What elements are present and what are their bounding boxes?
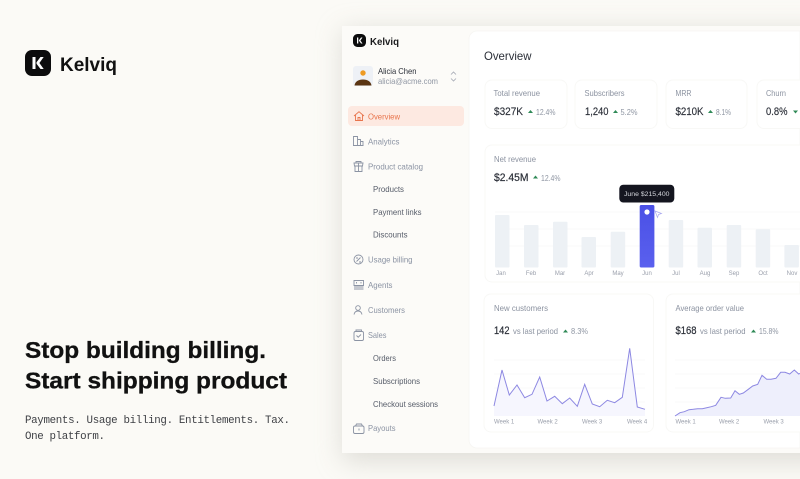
panel: average order value chart bbox=[666, 294, 800, 432]
week labels: Week 1 bbox=[494, 420, 515, 426]
data point marker bbox=[644, 209, 650, 215]
sub-items: catalog bbox=[373, 184, 422, 240]
month labels: Jun bbox=[642, 271, 652, 277]
tooltip: June $215,400 bbox=[624, 191, 670, 198]
KPI card: Total revenue: $327K bbox=[494, 106, 523, 118]
headline: Stop building billing. bbox=[25, 337, 266, 363]
subheading bbox=[25, 415, 290, 443]
sidebar logo bbox=[353, 34, 399, 48]
KPI card: Subscribers: 5.2% bbox=[620, 108, 638, 117]
headline: Start shipping product bbox=[25, 368, 287, 394]
month labels: Apr bbox=[584, 271, 594, 277]
sub-items: sales: Checkout sessions bbox=[373, 399, 438, 409]
panel: main content bbox=[469, 31, 800, 448]
app window bbox=[342, 26, 800, 453]
nav item: Analytics bbox=[353, 136, 400, 146]
panel: average order value chart: Average order value bbox=[676, 303, 744, 313]
nav item: Payouts: Payouts bbox=[368, 423, 396, 433]
panel: average order value chart: $168 bbox=[676, 325, 696, 337]
panel: new customers chart bbox=[484, 294, 654, 432]
sub-items: sales: Subscriptions bbox=[373, 376, 420, 386]
month labels: Feb bbox=[526, 271, 537, 277]
page title: Overview bbox=[484, 49, 532, 63]
month labels: Aug bbox=[700, 271, 710, 277]
month labels: Mar bbox=[555, 271, 565, 277]
KPI card: Churn: 0.8% bbox=[766, 106, 788, 118]
week labels bbox=[676, 420, 784, 426]
nav item: Overview (active): Overview bbox=[368, 112, 401, 122]
panel: average order value chart: vs last period bbox=[700, 326, 746, 336]
sidebar logo: Kelviq bbox=[370, 36, 399, 48]
nav item: Overview (active) bbox=[348, 106, 464, 126]
week labels bbox=[494, 420, 648, 426]
bars bbox=[495, 205, 799, 268]
nav item: Customers bbox=[354, 305, 405, 315]
user profile: Alicia Chen bbox=[378, 66, 417, 76]
area chart bbox=[675, 370, 800, 416]
week labels: Week 2 bbox=[719, 420, 740, 426]
sub-items: sales bbox=[373, 353, 438, 409]
panel: new customers chart: 142 bbox=[494, 325, 510, 337]
week labels: Week 2 bbox=[538, 420, 558, 426]
cursor arrow bbox=[655, 211, 662, 218]
KPI card: Churn: Churn bbox=[766, 88, 786, 98]
KPI card: MRR bbox=[666, 80, 747, 128]
month labels: Sep bbox=[729, 271, 740, 277]
month labels: Nov bbox=[787, 271, 797, 277]
KPI card: Subscribers: Subscribers bbox=[584, 88, 624, 98]
week labels: Week 1 bbox=[676, 420, 696, 426]
month labels: May bbox=[612, 271, 624, 277]
tooltip bbox=[619, 185, 674, 202]
KPI card: Total revenue: 12.4% bbox=[536, 108, 556, 117]
KPI card: Churn bbox=[757, 80, 800, 128]
panel: net revenue chart: $2.45M bbox=[494, 172, 528, 184]
panel: new customers chart: vs last period bbox=[513, 326, 558, 336]
panel: net revenue chart: Net revenue bbox=[494, 154, 536, 164]
nav item: Payouts bbox=[354, 423, 396, 434]
KPI card: Subscribers bbox=[575, 80, 657, 128]
KPI card: MRR: 8.1% bbox=[716, 108, 731, 117]
KPI card: MRR: MRR bbox=[676, 88, 692, 98]
panel: sidebar bbox=[348, 34, 464, 434]
KPI card: Subscribers: 1,240 bbox=[585, 106, 609, 118]
subheading: One platform. bbox=[25, 431, 105, 443]
subheading: Payments. Usage billing. Entitlements. Tax. bbox=[25, 415, 290, 427]
sub-items: sales: Orders bbox=[373, 353, 396, 363]
month labels: Jan bbox=[496, 271, 506, 277]
wordmark: Kelviq bbox=[60, 54, 117, 76]
logo: Kelviq bbox=[25, 50, 117, 76]
nav item: Analytics: Analytics bbox=[368, 136, 400, 146]
month labels: Jul bbox=[672, 271, 680, 277]
nav item: Usage billing: Usage billing bbox=[368, 254, 413, 264]
month labels bbox=[496, 271, 797, 277]
week labels: Week 4 bbox=[627, 420, 648, 426]
user profile bbox=[353, 66, 456, 86]
month labels: Oct bbox=[758, 271, 768, 277]
line chart bbox=[494, 348, 645, 416]
sub-items: catalog: Discounts bbox=[373, 230, 408, 240]
KPI card: MRR: $210K bbox=[676, 106, 704, 118]
panel: average order value chart: 15.8% bbox=[759, 327, 778, 336]
nav item: Sales: Sales bbox=[368, 330, 386, 340]
headline bbox=[25, 337, 287, 394]
nav item: Product catalog: Product catalog bbox=[368, 162, 423, 172]
user profile: alicia@acme.com bbox=[378, 76, 438, 86]
KPI card: Total revenue: Total revenue bbox=[494, 88, 540, 98]
panel: new customers chart: 8.3% bbox=[571, 327, 588, 336]
sub-items: catalog: Payment links bbox=[373, 207, 422, 217]
week labels: Week 3 bbox=[582, 420, 603, 426]
icon: Kelviq mark bbox=[25, 50, 51, 76]
KPI card: Total revenue bbox=[485, 80, 567, 128]
nav item: Agents bbox=[354, 280, 392, 290]
week labels: Week 3 bbox=[764, 420, 784, 426]
panel: net revenue chart bbox=[485, 145, 800, 282]
panel: new customers chart: New customers bbox=[494, 303, 548, 313]
sub-items: catalog: Products bbox=[373, 184, 404, 194]
nav item: Agents: Agents bbox=[368, 280, 392, 290]
panel: net revenue chart: 12.4% bbox=[541, 174, 560, 183]
nav item: Customers: Customers bbox=[368, 305, 405, 315]
nav item: Sales bbox=[354, 330, 386, 340]
